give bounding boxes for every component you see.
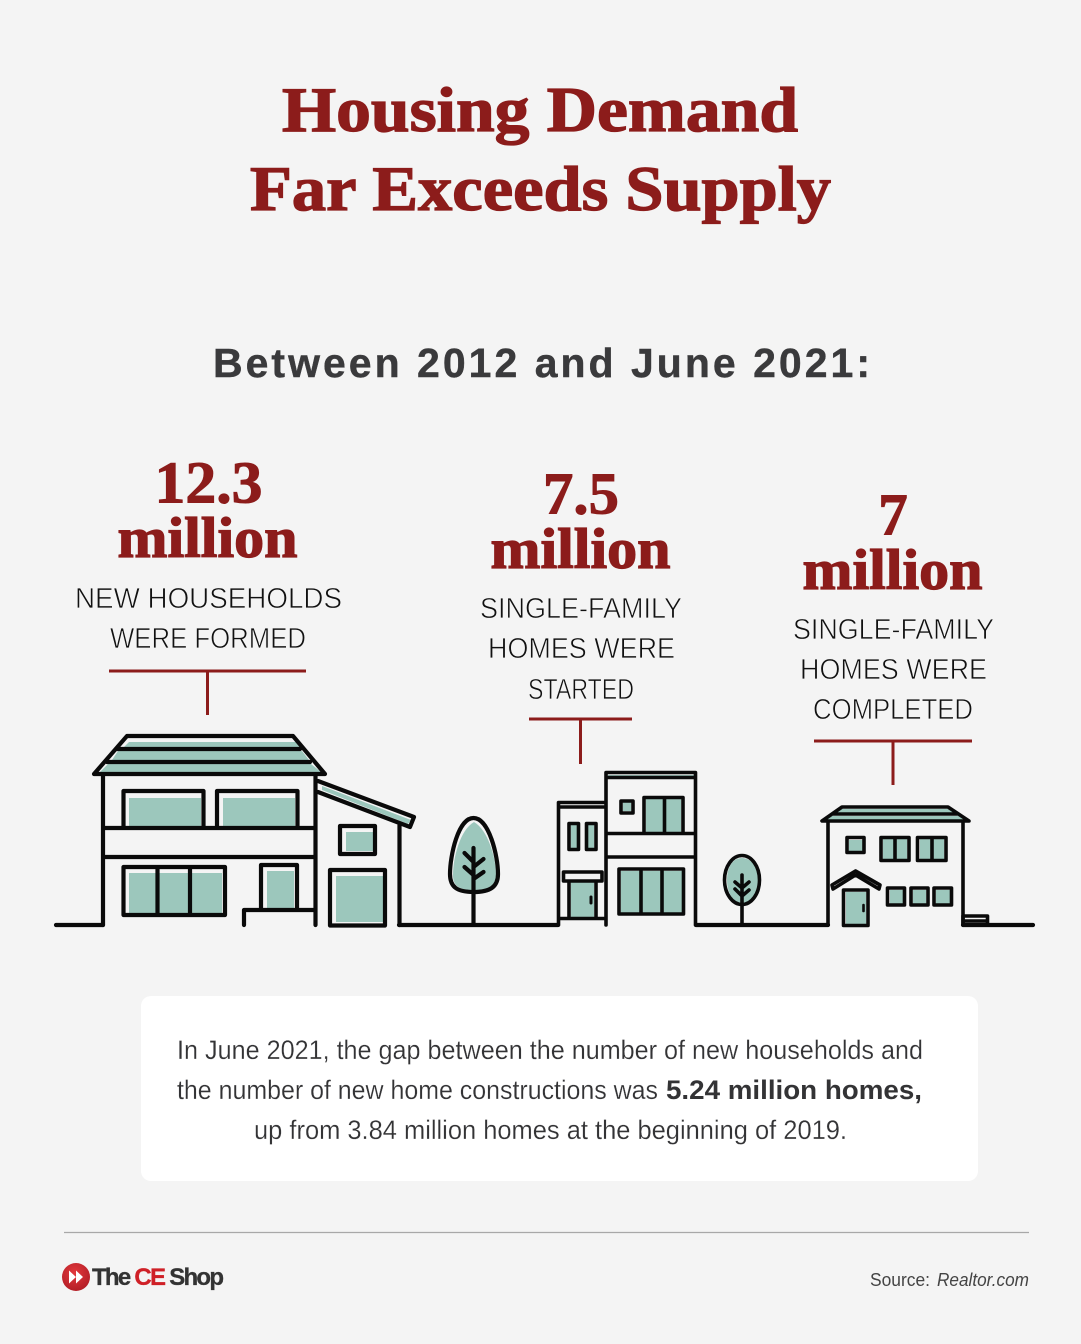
source: Realtor.com xyxy=(937,1270,1029,1290)
panel: gap callout: up from 3.84 million homes at the beginning of 2019. xyxy=(254,1115,847,1145)
stat: 7 million homes completed xyxy=(793,482,994,726)
stat: 12.3 million new households: million xyxy=(118,507,298,570)
stat: 7 million homes completed: million xyxy=(802,539,982,602)
stat: 7 million homes completed: HOMES WERE xyxy=(800,654,987,686)
stat: 7 million homes completed: SINGLE-FAMILY xyxy=(793,614,994,646)
panel: gap callout: In June 2021, the gap between the number of new households and xyxy=(177,1035,923,1065)
logo: The CE Shop: The CE Shop xyxy=(92,1264,224,1291)
panel: gap callout: the number of new home constructions was xyxy=(177,1075,658,1105)
footer rule xyxy=(64,1232,1029,1234)
source xyxy=(870,1270,1029,1290)
callout line: completed xyxy=(814,741,972,785)
stat: 7.5 million homes started: STARTED xyxy=(528,674,634,706)
stat: 7.5 million homes started: 7.5 xyxy=(543,460,619,526)
title: Far Exceeds Supply xyxy=(250,153,831,224)
stat: 7.5 million homes started xyxy=(480,460,682,706)
house: right xyxy=(822,807,988,926)
stat: 12.3 million new households: NEW HOUSEHOLDS xyxy=(75,583,342,615)
subheading: Between 2012 and June 2021: xyxy=(213,340,870,386)
stat: 12.3 million new households: WERE FORMED xyxy=(110,623,306,655)
stat: 12.3 million new households: 12.3 xyxy=(154,450,262,516)
house: narrow two-part xyxy=(558,772,696,925)
stat: 12.3 million new households xyxy=(75,450,342,655)
house: large xyxy=(94,736,414,926)
callout line: households xyxy=(109,671,306,715)
panel: gap callout xyxy=(141,996,978,1181)
title: Housing Demand xyxy=(282,74,798,145)
stat: 7.5 million homes started: HOMES WERE xyxy=(488,633,675,665)
stat: 7.5 million homes started: SINGLE-FAMILY xyxy=(480,593,682,625)
ground line xyxy=(56,923,1033,927)
stat: 7.5 million homes started: million xyxy=(490,518,670,581)
source: Source: xyxy=(870,1270,930,1290)
panel: gap callout: 5.24 million homes, xyxy=(666,1075,922,1105)
stat: 7 million homes completed: COMPLETED xyxy=(813,694,973,726)
title xyxy=(250,74,831,224)
stat: 7 million homes completed: 7 xyxy=(878,482,908,548)
icon: tree small xyxy=(724,856,760,924)
callout line: started xyxy=(529,719,632,764)
icon: tree large xyxy=(450,818,498,923)
